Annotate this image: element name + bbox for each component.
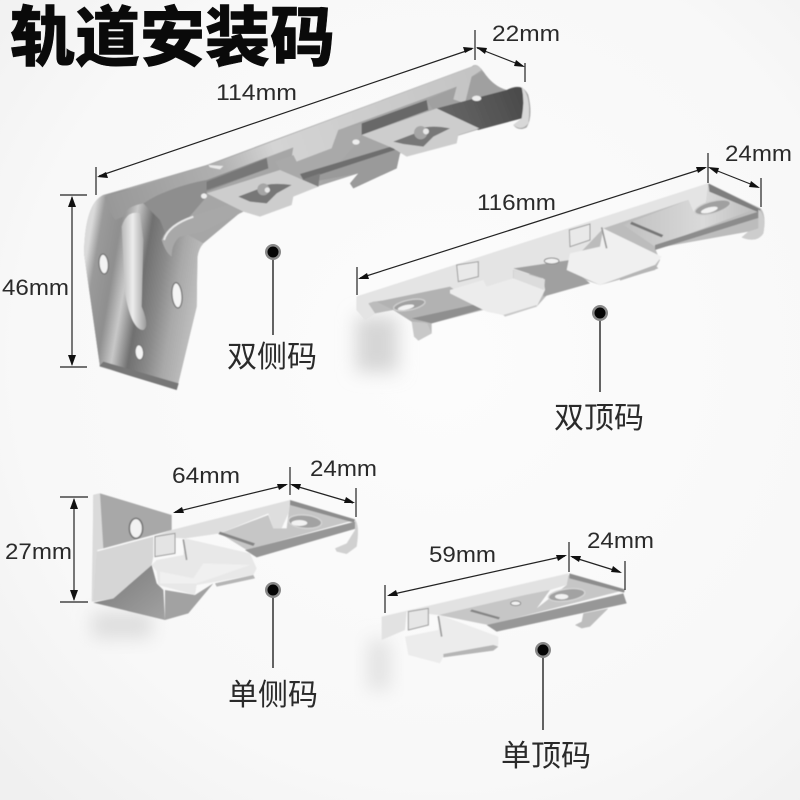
dimension: 46mm height: 46mm	[2, 275, 69, 300]
label: single side: 单侧码	[228, 679, 318, 712]
dimension: 24mm width	[570, 528, 654, 590]
icon: wall shadow single top	[368, 640, 390, 690]
dimension: 46mm height	[2, 195, 87, 367]
label: single top: 单顶码	[501, 740, 591, 773]
dimension: 64mm length: 64mm	[172, 463, 240, 488]
dimension: 24mm width: 24mm	[725, 141, 792, 166]
dimension: 64mm length	[172, 463, 290, 513]
dimension: 22mm width	[476, 21, 560, 82]
dimension: 24mm width: 24mm	[310, 456, 377, 481]
callout: double side pointer	[265, 244, 281, 335]
dimension: 114mm length	[96, 30, 475, 195]
icon: single side bracket illustration	[92, 493, 358, 620]
panel: single top bracket	[368, 528, 654, 773]
dimension: 22mm width: 22mm	[492, 21, 560, 46]
dimension: 24mm width: 24mm	[587, 528, 654, 553]
dimension: 114mm length: 114mm	[216, 80, 297, 105]
dimension: 24mm width	[290, 456, 377, 517]
callout: single side pointer	[265, 582, 281, 668]
dimension: 27mm height	[5, 497, 88, 602]
dimension: 116mm length	[357, 153, 708, 295]
panel: single side bracket	[5, 456, 377, 712]
dimension: 59mm length: 59mm	[429, 542, 496, 567]
icon: single top bracket illustration	[382, 573, 627, 663]
label: double side: 双侧码	[227, 341, 317, 374]
icon: wall shadow double top	[356, 316, 398, 372]
callout: double top pointer	[592, 305, 608, 392]
icon: wall shadow single side	[92, 612, 152, 638]
dimension: 116mm length: 116mm	[477, 190, 556, 215]
icon: double side bracket illustration	[84, 65, 530, 390]
dimension: 24mm width	[708, 141, 792, 207]
panel: double top bracket	[356, 141, 792, 435]
callout: single top pointer	[535, 642, 551, 730]
title: 轨道安装码	[10, 1, 335, 74]
label: double top: 双顶码	[554, 402, 644, 435]
panel: double side bracket	[2, 21, 560, 390]
dimension: 27mm height: 27mm	[5, 539, 72, 564]
icon: double top bracket illustration	[357, 183, 765, 341]
dimension: 59mm length	[385, 542, 569, 613]
